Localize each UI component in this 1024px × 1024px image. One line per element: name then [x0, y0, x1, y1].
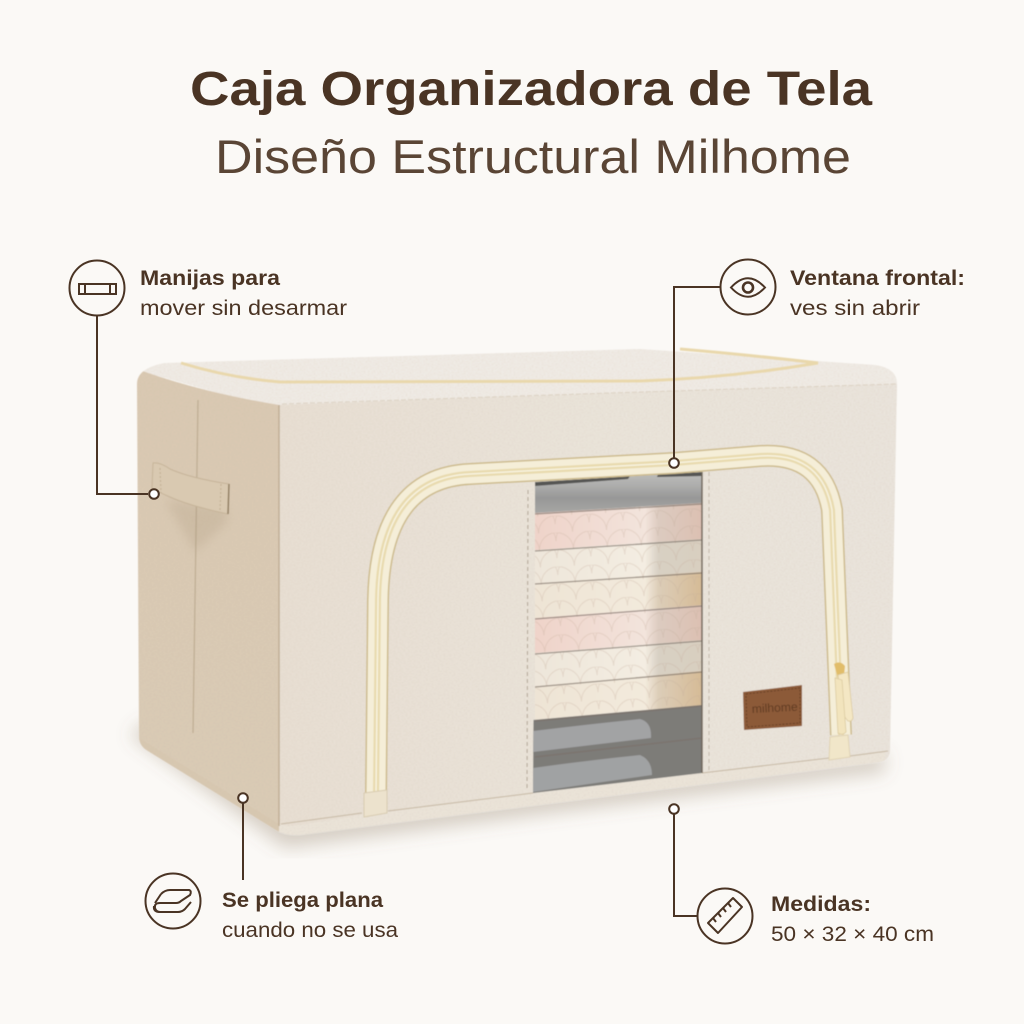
- side face: [137, 369, 279, 835]
- text: folds flat: Se pliega plana: [222, 889, 383, 912]
- window with folded textiles: [533, 472, 702, 795]
- cream towel: [542, 671, 702, 716]
- pink towel: [535, 605, 702, 654]
- side fold line: [193, 400, 198, 733]
- anchor dot: [149, 489, 159, 499]
- zipper end tab right: [829, 735, 850, 760]
- text: front window: ves sin abrir: [790, 297, 920, 320]
- leader line: [97, 316, 148, 494]
- text: front window: Ventana frontal:: [790, 267, 965, 290]
- scallop pattern: [535, 503, 702, 721]
- leather brand label: milhome: [751, 700, 798, 716]
- left flap stitching: [527, 490, 528, 790]
- text: folds flat: cuando no se usa: [222, 919, 398, 942]
- box body: [130, 340, 910, 840]
- window top gray band: [535, 472, 702, 515]
- gray towel upper: [533, 719, 651, 752]
- callout: folds flat: [146, 793, 398, 942]
- icon: ruler: [698, 888, 752, 944]
- dark lower compartment: [533, 705, 702, 795]
- leader line: [674, 287, 720, 458]
- right flap stitching: [708, 472, 710, 770]
- window frame edge: [701, 472, 703, 773]
- icon: folded fabric: [146, 874, 200, 928]
- lid zipper trim: [181, 349, 818, 382]
- text: handles: Manijas para: [140, 267, 280, 290]
- text: handles: mover sin desarmar: [140, 297, 347, 320]
- text: handles: [140, 267, 347, 320]
- anchor dot: [669, 458, 679, 468]
- rim seam: [281, 751, 888, 824]
- shelf lines: [535, 504, 702, 757]
- side bottom rim: [139, 738, 279, 838]
- title: Caja Organizadora de Tela: [190, 63, 872, 116]
- leather brand label: [743, 685, 802, 730]
- front face: [279, 384, 900, 835]
- cream towel: [546, 541, 702, 580]
- top face: [130, 340, 900, 410]
- pink towel: [535, 503, 702, 551]
- zipper: [376, 456, 841, 795]
- cream towel: [552, 572, 702, 614]
- callout: front window: [669, 260, 965, 468]
- fabric grain: [130, 340, 910, 840]
- leader line: [242, 803, 244, 880]
- cream towel: [546, 642, 702, 682]
- callout: dimensions: [669, 804, 934, 946]
- text: front window: [790, 267, 965, 320]
- subtitle: Diseño Estructural Milhome: [215, 130, 851, 183]
- product: fabric storage box: [130, 340, 910, 848]
- top stitching line: [282, 384, 896, 404]
- corner edge seam: [278, 405, 280, 826]
- text: dimensions: Medidas:: [771, 893, 871, 916]
- icon: eye: [720, 260, 776, 314]
- anchor dot: [669, 804, 679, 814]
- leader line: [674, 814, 698, 916]
- anchor dot: [238, 793, 248, 803]
- floor shadow: [130, 720, 885, 848]
- window top dark edge: [535, 472, 702, 486]
- text: folds flat: [222, 889, 398, 942]
- handle: [152, 463, 229, 552]
- callout: handles: [70, 260, 347, 499]
- text: dimensions: [771, 893, 934, 946]
- text: dimensions: 50 × 32 × 40 cm: [771, 923, 934, 946]
- zipper pull: [834, 662, 853, 734]
- zipper end tab left: [364, 790, 387, 817]
- gray towel lower: [533, 755, 652, 792]
- icon: handle: [70, 260, 124, 316]
- bottom rim: [289, 820, 416, 836]
